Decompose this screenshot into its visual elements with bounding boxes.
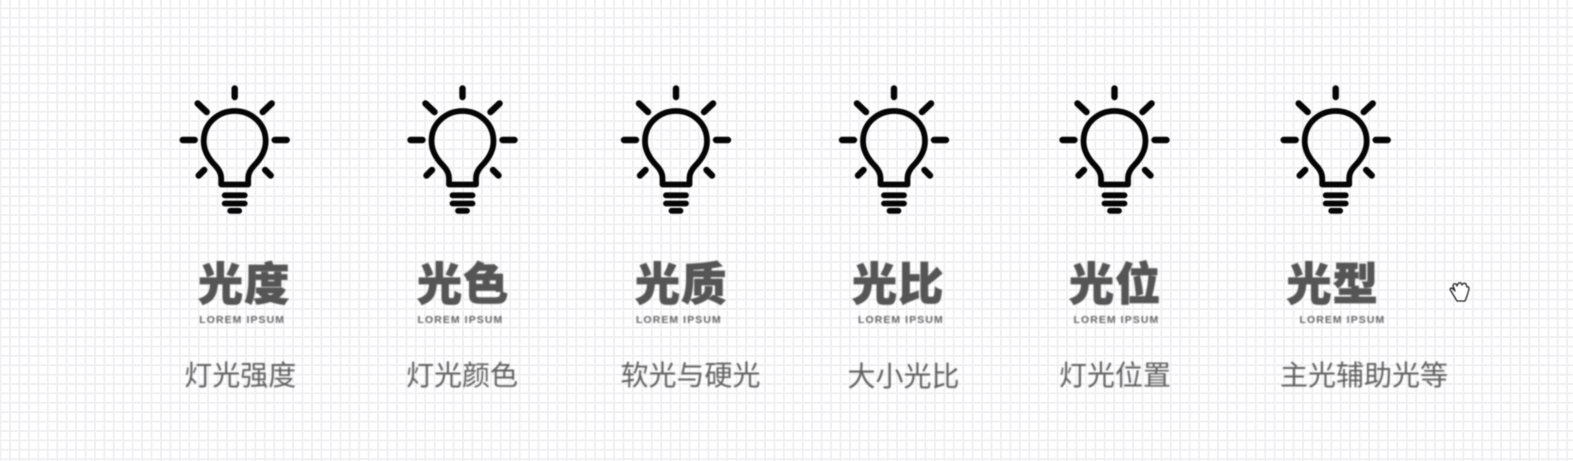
icon: bulb 6 [1284,88,1388,211]
label: 灯光颜色: 灯光颜色 [406,360,518,390]
icon: bulb 2 [410,88,514,211]
heading: 光比: 光比 [852,259,945,310]
heading: 光度: 光度 [198,259,291,310]
icon: hand cursor [1450,283,1469,301]
label: 软光与硬光: 软光与硬光 [620,360,761,390]
caption: lorem ipsum 3: LOREM IPSUM [636,315,722,326]
caption: lorem ipsum 1: LOREM IPSUM [199,315,285,326]
caption: lorem ipsum 2: LOREM IPSUM [418,315,503,326]
icon: bulb 5 [1062,88,1166,211]
icon: bulb 1 [183,88,287,211]
icon: bulb 4 [842,88,946,211]
heading: 光位: 光位 [1069,259,1162,310]
caption: lorem ipsum 6: LOREM IPSUM [1300,315,1385,326]
label: 灯光位置: 灯光位置 [1059,360,1171,390]
heading: 光质: 光质 [635,259,728,310]
label: 灯光强度: 灯光强度 [184,360,296,390]
label: 主光辅助光等: 主光辅助光等 [1280,360,1448,390]
heading: 光色: 光色 [417,259,510,310]
label: 大小光比: 大小光比 [848,361,960,392]
heading: 光型: 光型 [1286,259,1379,310]
caption: lorem ipsum 4: LOREM IPSUM [858,315,944,326]
caption: lorem ipsum 5: LOREM IPSUM [1074,315,1159,326]
icon: bulb 3 [624,88,728,211]
